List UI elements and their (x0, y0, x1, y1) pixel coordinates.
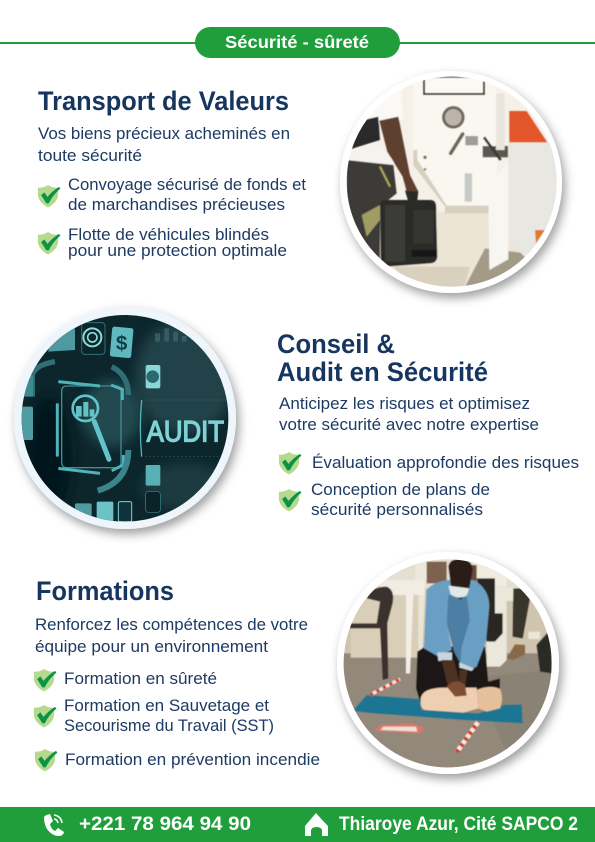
bullet: surete: Formation en sûreté (64, 670, 217, 688)
bullet: convoyage (38, 176, 307, 214)
bullet: surete (34, 669, 217, 691)
bullet: conception: sécurité personnalisés (311, 501, 483, 519)
bullet: conception: Conception de plans de (311, 481, 490, 499)
header line (0, 42, 595, 44)
heading: transport: Transport de Valeurs (38, 86, 289, 116)
bullet: conception (279, 481, 490, 519)
bullet: sst: Secourisme du Travail (SST) (64, 717, 274, 735)
header pill: Sécurité - sûreté (225, 32, 369, 52)
bullet: convoyage: Convoyage sécurisé de fonds et (68, 176, 307, 194)
bullet: sst (34, 697, 274, 735)
intro text: transport (38, 125, 290, 165)
intro text: formations: Renforcez les compétences de votre (35, 616, 308, 634)
icon: phone (44, 814, 64, 836)
intro text: conseil: votre sécurité avec notre expertise (279, 416, 539, 434)
heading: formations: Formations (36, 576, 174, 606)
bullet: evaluation (279, 452, 579, 474)
photo: digital audit screen: AUDIT (147, 416, 224, 449)
intro text: formations (35, 616, 308, 656)
bullet: flotte (38, 226, 287, 260)
bullet: flotte: Flotte de véhicules blindés (68, 226, 269, 244)
heading: conseil: Conseil & (277, 329, 395, 359)
section: formations (34, 576, 320, 771)
heading: conseil: Audit en Sécurité (277, 357, 488, 387)
section: conseil et audit (277, 329, 579, 519)
bullet: flotte: pour une protection optimale (68, 242, 287, 260)
bullet: sst: Formation en Sauvetage et (64, 697, 270, 715)
address: Thiaroye Azur, Cité SAPCO 2 (339, 814, 578, 835)
phone number: +221 78 964 94 90 (79, 814, 251, 835)
intro text: formations: équipe pour un environnement (35, 638, 269, 656)
photo: guard carrying case near armoured truck (336, 70, 572, 304)
photo: digital audit screen (10, 306, 246, 540)
bullet: incendie (35, 749, 320, 771)
icon: house (305, 813, 328, 836)
photo: first aid training with manikin (334, 550, 568, 786)
bullet: evaluation: Évaluation approfondie des risques (312, 453, 579, 472)
bullet: incendie: Formation en prévention incendie (65, 751, 320, 769)
footer bar (0, 807, 595, 842)
header pill (195, 27, 400, 58)
intro text: transport: toute sécurité (38, 147, 142, 165)
intro text: transport: Vos biens précieux acheminés en (38, 125, 290, 143)
section: transport de valeurs (38, 86, 307, 260)
photo: digital audit screen: $ (116, 332, 128, 355)
intro text: conseil: Anticipez les risques et optimisez (279, 395, 530, 413)
intro text: conseil (279, 395, 539, 434)
heading: conseil (277, 329, 488, 387)
bullet: convoyage: de marchandises précieuses (68, 196, 285, 214)
